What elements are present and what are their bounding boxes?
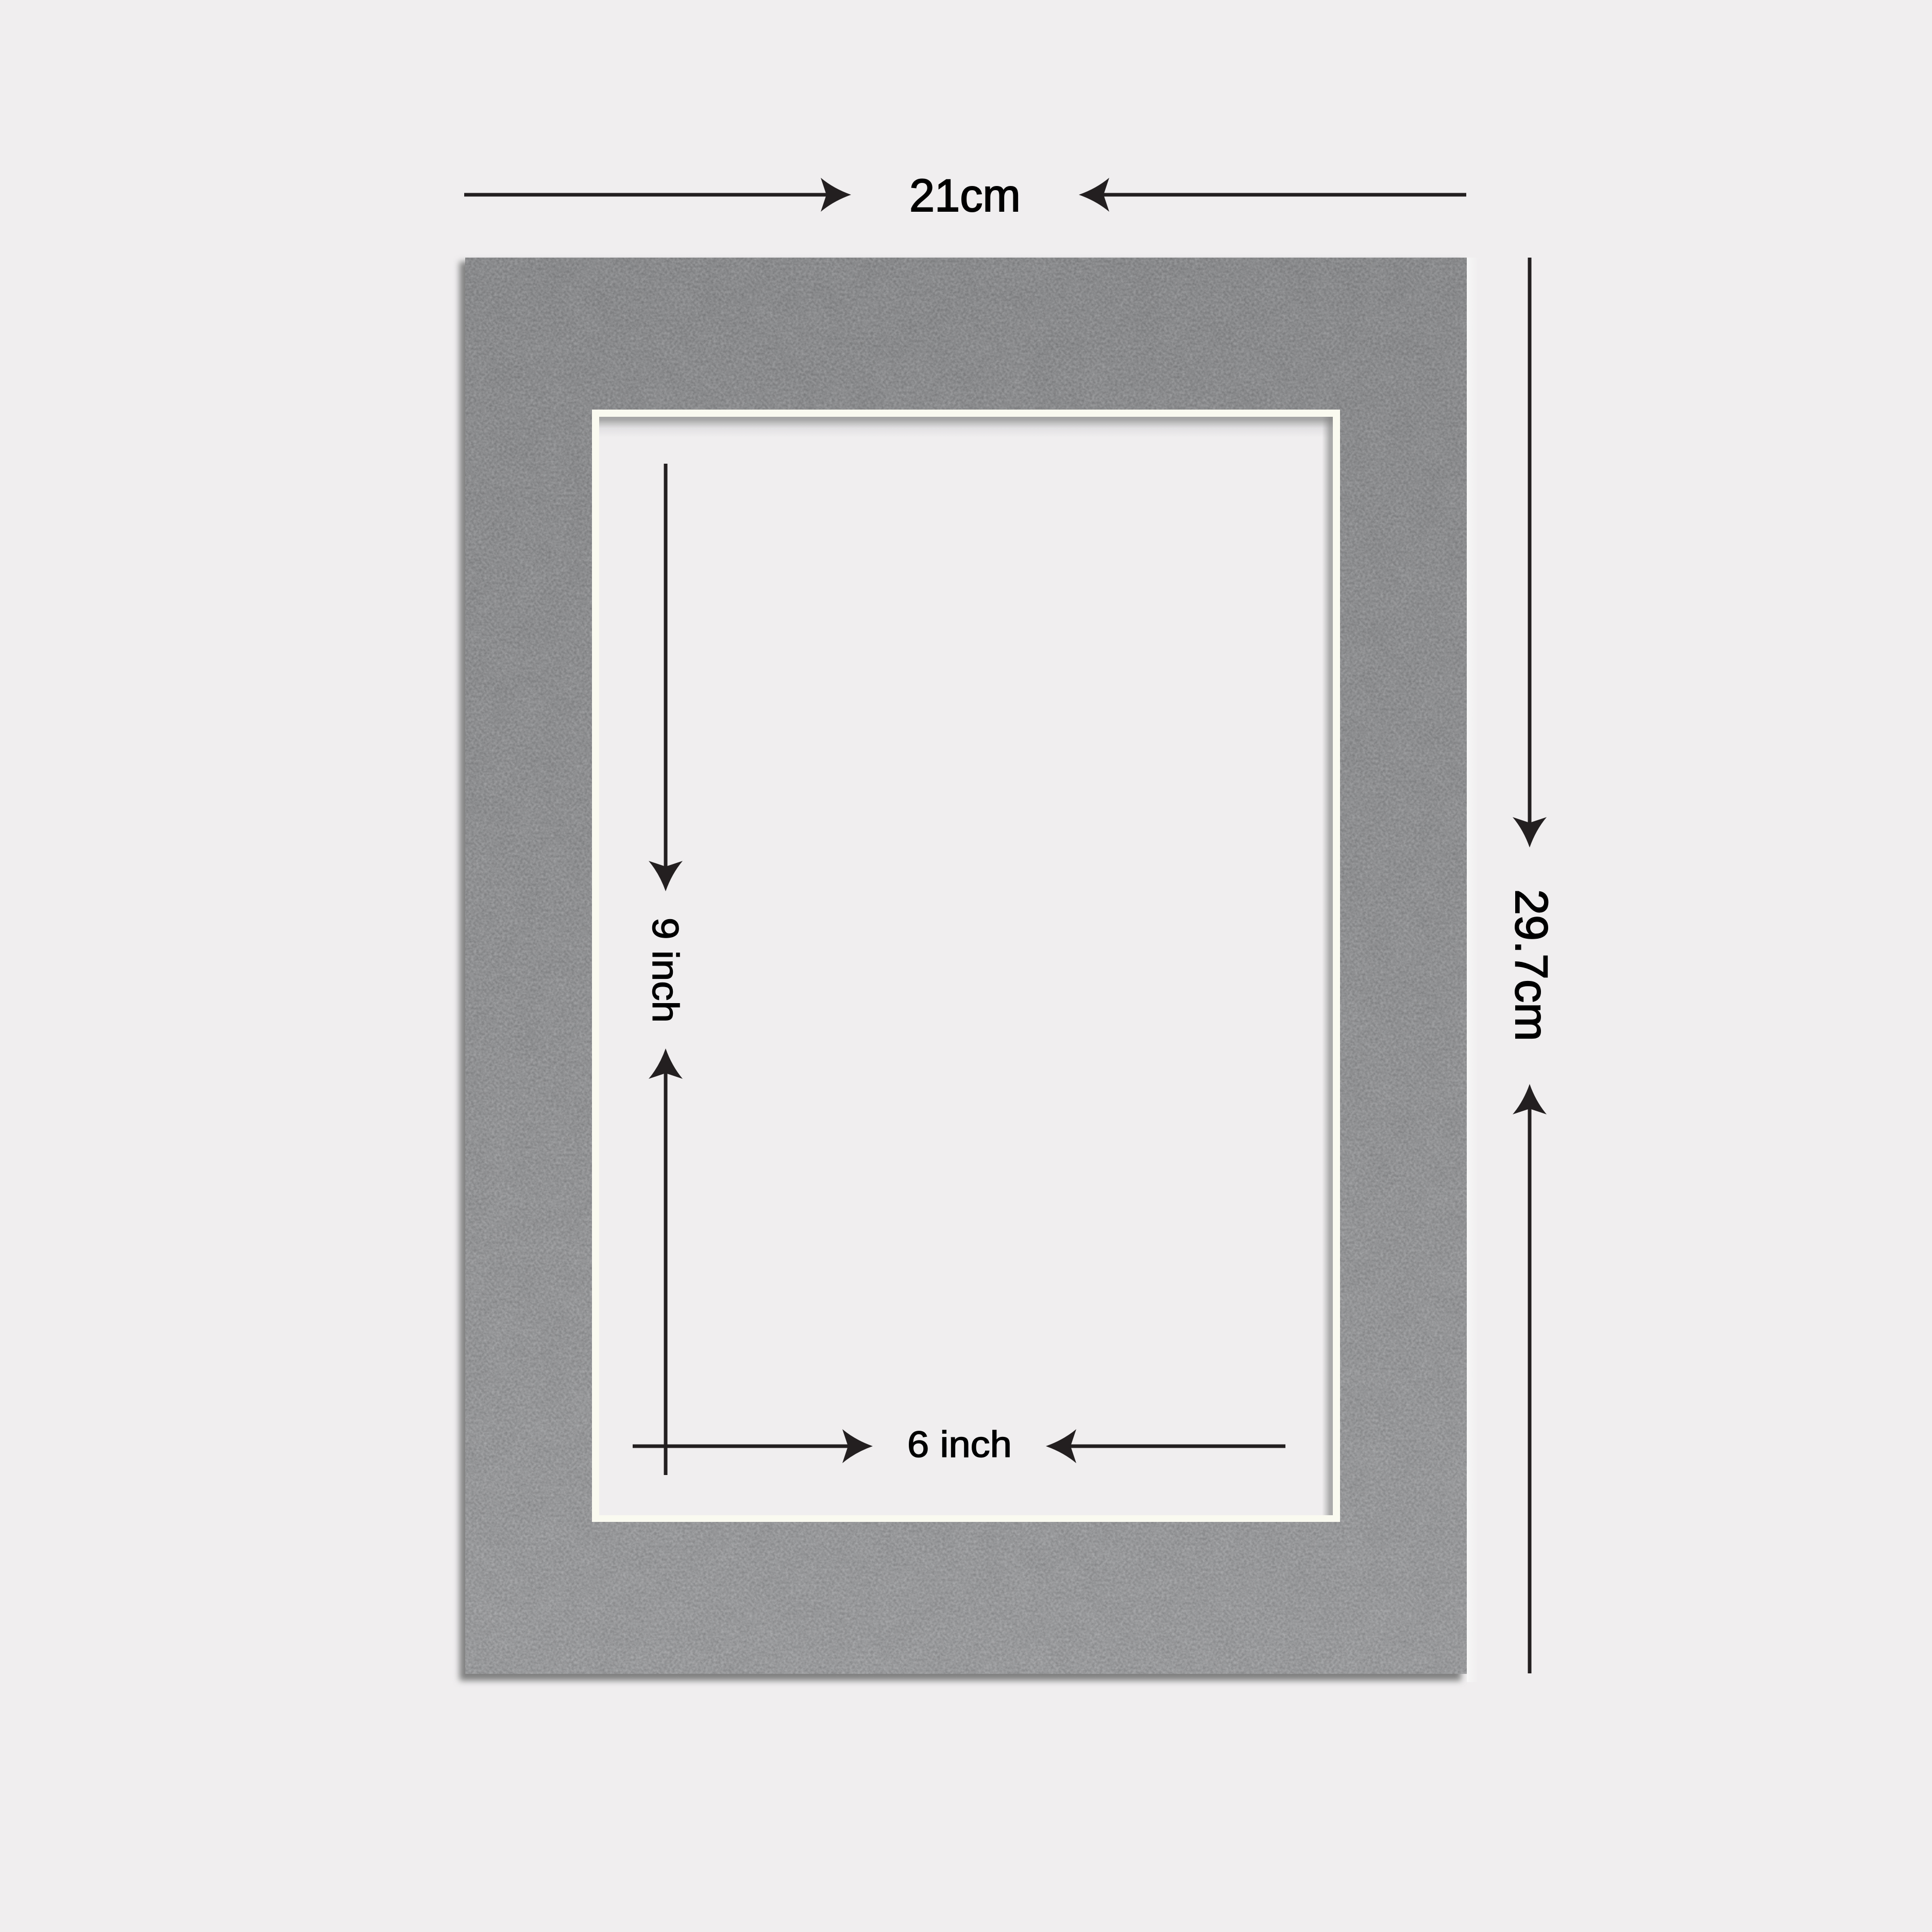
window right inner shadow bbox=[1322, 417, 1333, 1515]
window bevel bbox=[592, 410, 1340, 1522]
arrow: inner bottom right, pointing left bbox=[1046, 1429, 1285, 1463]
window top inner shadow bbox=[599, 417, 1333, 437]
label: 21cm: 21cm bbox=[909, 170, 1021, 221]
window opening bbox=[599, 417, 1333, 1515]
arrow: right side upper, pointing down bbox=[1513, 258, 1547, 848]
mat board bbox=[465, 258, 1467, 1674]
mat paper texture bbox=[465, 258, 1467, 1674]
arrow: top right, pointing left bbox=[1079, 178, 1466, 212]
panel: grey photo mat bbox=[460, 258, 1478, 1682]
arrow: top left, pointing right bbox=[464, 178, 851, 212]
arrow: inner left upper, pointing down bbox=[649, 464, 683, 891]
label: 29.7cm: 29.7cm bbox=[1506, 889, 1557, 1041]
mat drop shadow bbox=[460, 262, 1461, 1681]
mat right edge glow bbox=[1467, 258, 1478, 1682]
label: 6 inch: 6 inch bbox=[907, 1425, 1012, 1465]
arrow: inner left lower, pointing up bbox=[649, 1048, 683, 1475]
label: 9 inch: 9 inch bbox=[645, 918, 685, 1023]
arrow: right side lower, pointing up bbox=[1513, 1084, 1547, 1673]
arrow: inner bottom left, pointing right bbox=[633, 1429, 873, 1463]
mat cloudy mottling bbox=[465, 258, 1467, 1674]
